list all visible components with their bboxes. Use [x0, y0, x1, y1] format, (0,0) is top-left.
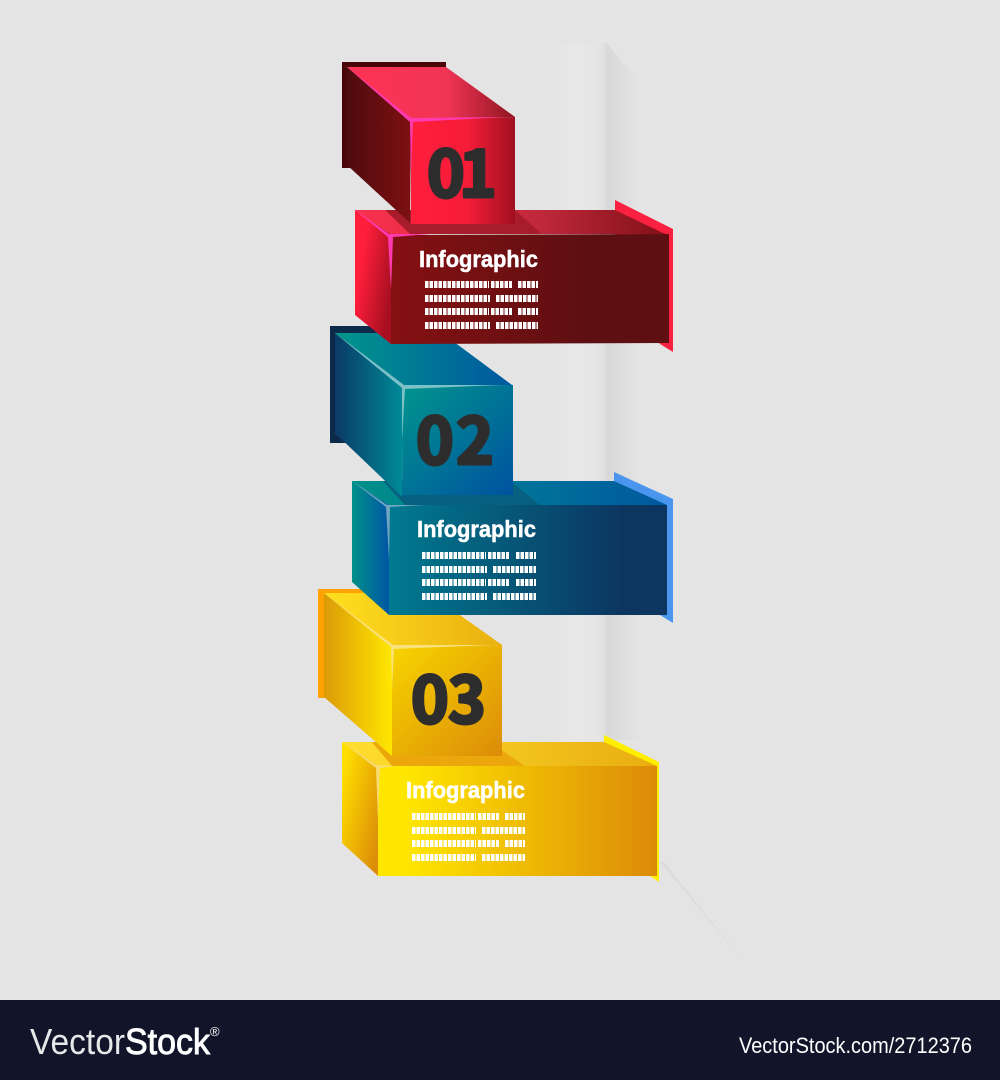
- placeholder text lines: [425, 284, 538, 326]
- footer bar: [0, 1000, 1000, 1080]
- number 01: 01: [427, 124, 497, 216]
- placeholder text lines: [412, 816, 525, 858]
- block 01 upper: red number cube: [342, 62, 515, 224]
- block 03 upper: yellow number cube: [318, 589, 502, 756]
- block 02 upper: blue number cube: [330, 326, 513, 497]
- logo: VectorStock: [30, 1021, 211, 1062]
- number 03: 03: [411, 650, 486, 742]
- logo: VectorStock: Stock: [125, 1021, 211, 1062]
- heading: Infographic: Infographic: [417, 516, 536, 542]
- heading: Infographic: Infographic: [406, 777, 525, 803]
- paper column: [552, 43, 742, 960]
- url: VectorStock.com/2712376: [739, 1033, 972, 1058]
- placeholder text lines: [422, 556, 536, 596]
- block 01 lower: red text panel: [355, 200, 673, 352]
- registered mark: ®: [210, 1024, 220, 1039]
- logo: VectorStock: Vector: [30, 1021, 125, 1062]
- block 02 lower: blue text panel: [352, 472, 673, 623]
- heading: Infographic: Infographic: [419, 246, 538, 272]
- block 03 lower: yellow text panel: [342, 735, 659, 882]
- number 02: 02: [416, 391, 494, 483]
